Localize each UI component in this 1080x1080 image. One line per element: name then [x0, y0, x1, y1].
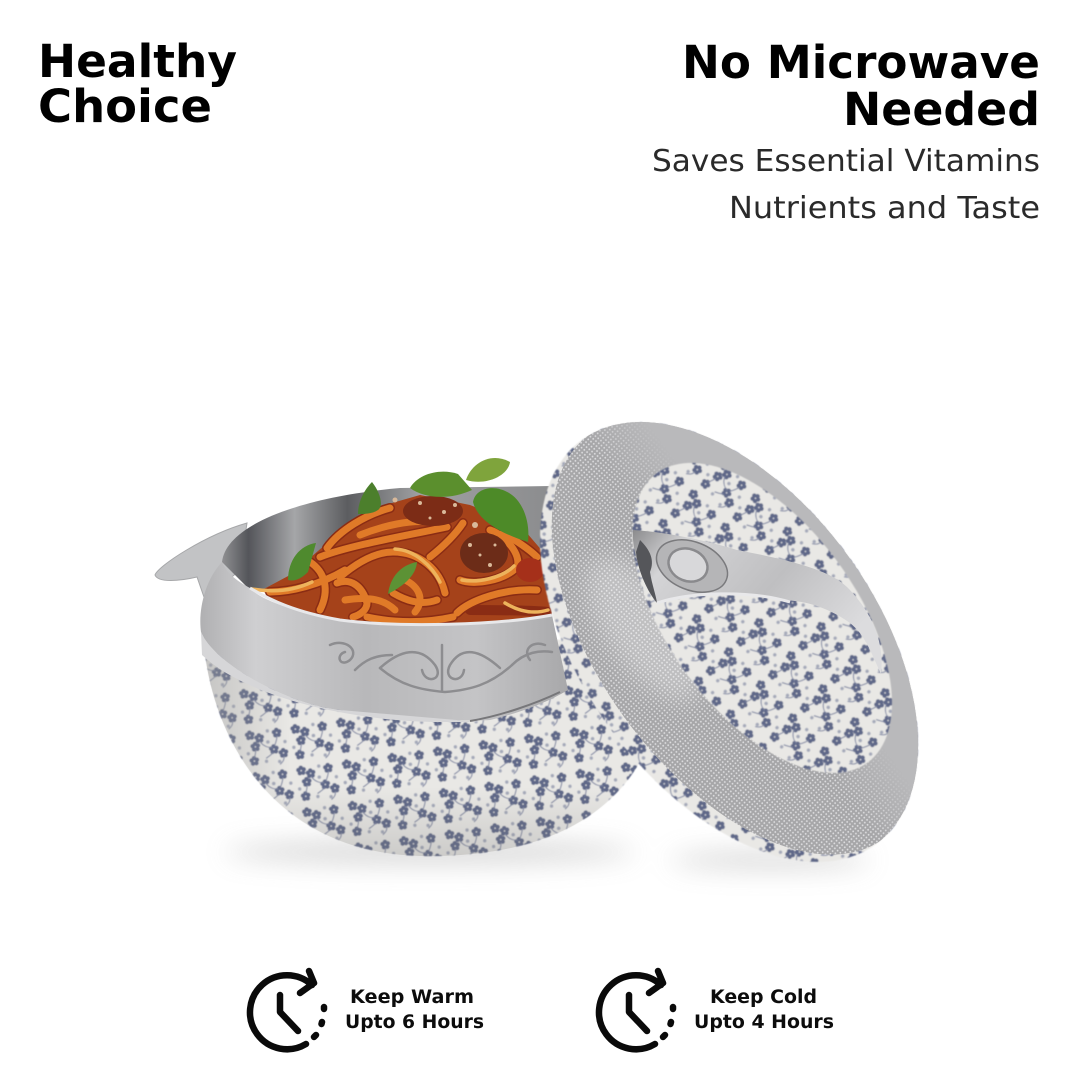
text block: benefits description: Nutrients and Taste [729, 191, 1040, 226]
icon: clock with arrow [250, 971, 324, 1049]
heading: No Microwave Needed: No Microwave [682, 36, 1040, 89]
silver collar [200, 562, 568, 721]
feature: keep warm [250, 971, 484, 1049]
label: keep warm [345, 987, 484, 1033]
bowl interior [222, 486, 552, 622]
label: keep cold: Keep Cold [710, 987, 817, 1008]
bowl body with floral print [203, 625, 640, 856]
bowl handle [155, 523, 247, 600]
text block: benefits description [652, 144, 1040, 226]
heading: No Microwave Needed [682, 36, 1040, 136]
lid handle and chrome knob [633, 530, 882, 674]
title: Healthy Choice: Choice [38, 80, 212, 133]
title: Healthy Choice [38, 35, 237, 133]
label: keep cold: Upto 4 Hours [694, 1012, 834, 1033]
basil leaves [288, 458, 528, 594]
product: casserole bowl [155, 458, 640, 856]
label: keep cold [694, 987, 834, 1033]
spaghetti with sauce and basil [252, 458, 550, 625]
label: keep warm: Upto 6 Hours [345, 1012, 484, 1033]
lid floral panel [581, 418, 943, 818]
heading: No Microwave Needed: Needed [843, 83, 1040, 136]
title: Healthy Choice: Healthy [38, 35, 237, 88]
feature: keep cold [599, 971, 834, 1049]
text block: benefits description: Saves Essential Vitamins [652, 144, 1040, 179]
icon: clock with arrow [599, 971, 673, 1049]
product: lid leaning on bowl [539, 421, 919, 863]
lid rim with floral print [463, 353, 995, 931]
embossed ornament [330, 643, 552, 692]
meat sauce [392, 496, 544, 582]
lid silver dome [552, 422, 918, 855]
label: keep warm: Keep Warm [350, 987, 474, 1008]
ground shadow [225, 840, 870, 869]
